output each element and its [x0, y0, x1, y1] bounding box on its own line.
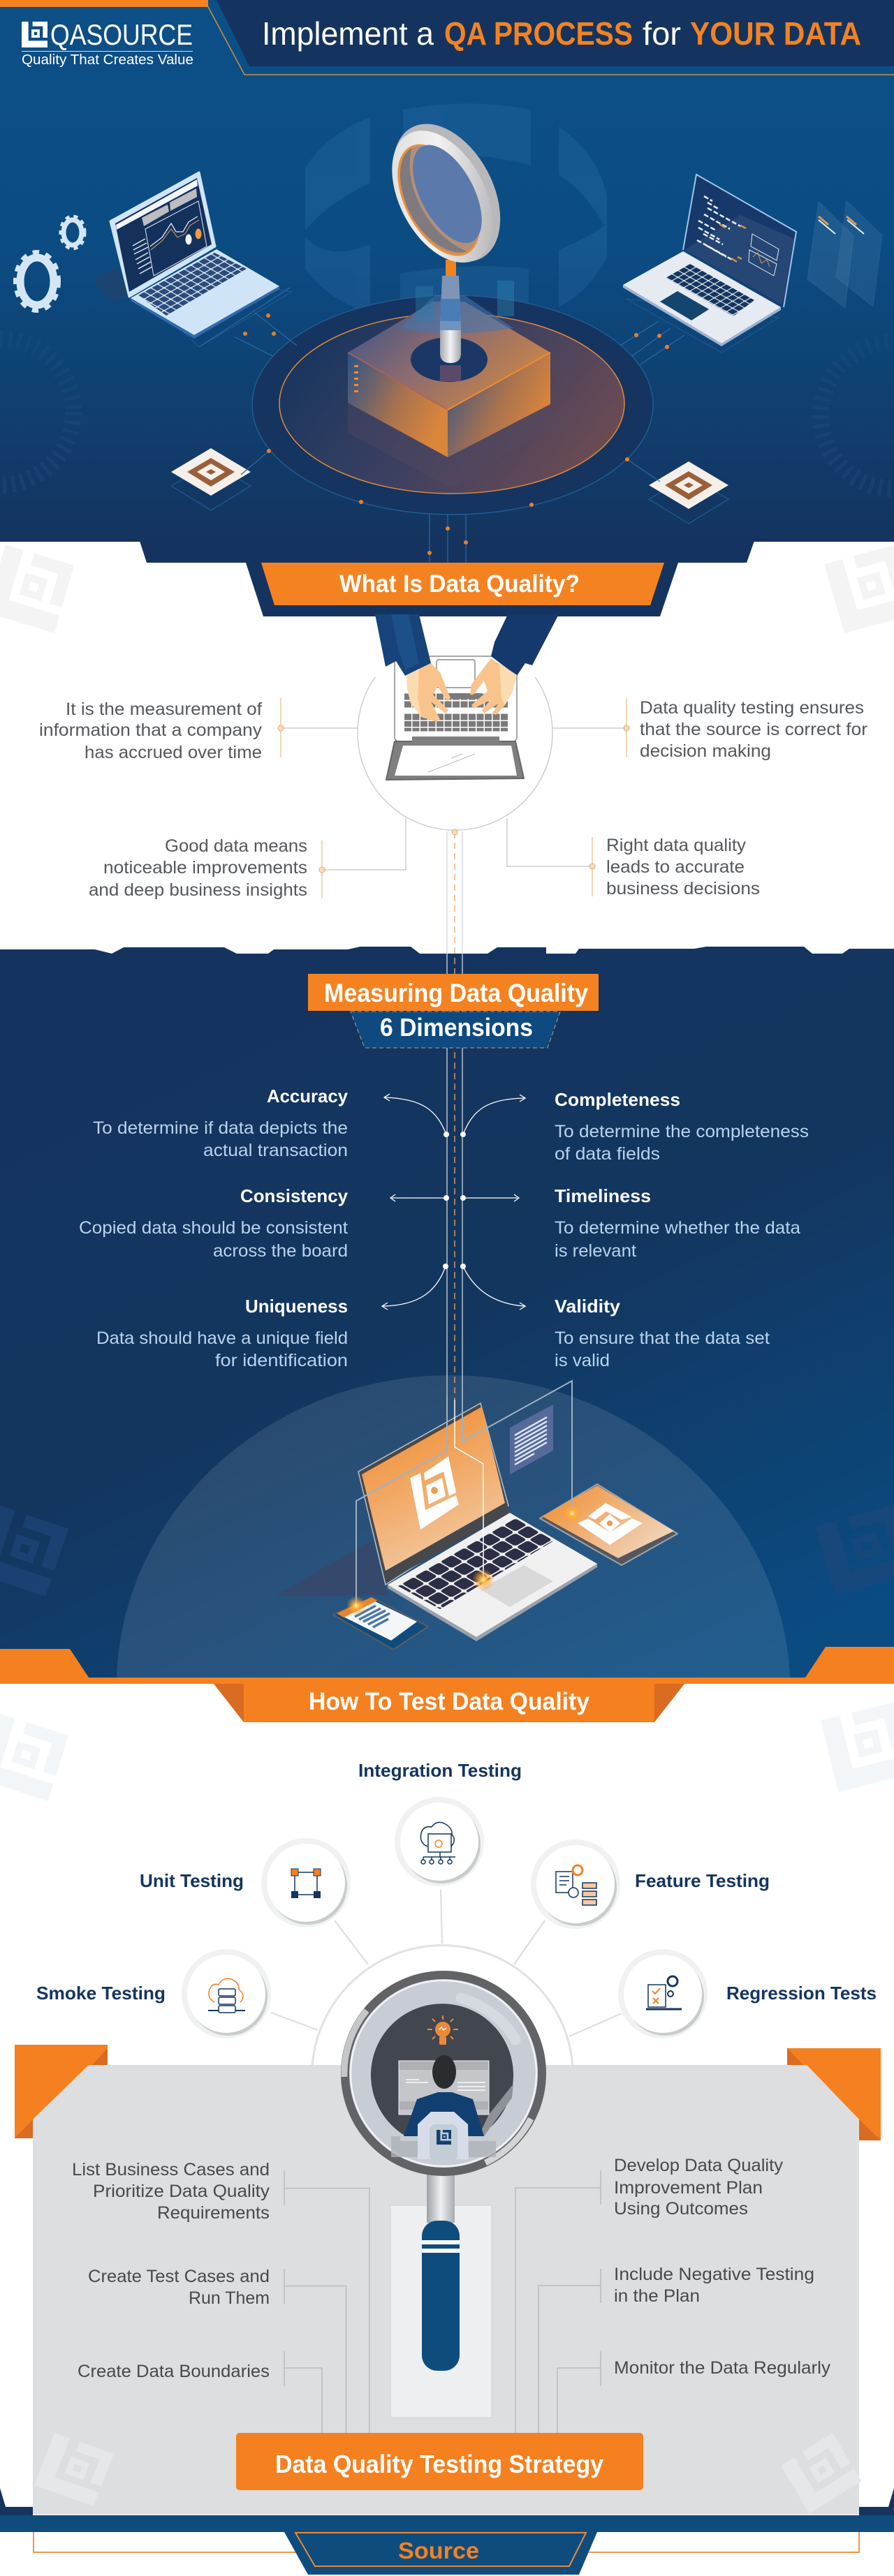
chair — [418, 2112, 469, 2159]
text block: Develop improvement plan — [614, 2156, 784, 2219]
icon: floating documents — [807, 201, 882, 308]
item: Integration Testing — [358, 1760, 522, 1886]
text block: good data: and deep business insights — [89, 880, 307, 900]
item: Uniqueness: for identification — [215, 1351, 348, 1370]
text block: measurement of information: has accrued over time — [85, 743, 262, 762]
item: Integration Testing: Integration Testing — [358, 1760, 522, 1781]
title: QA PROCESS — [444, 15, 633, 52]
icon: right laptop with code — [623, 175, 796, 353]
person — [404, 2092, 484, 2136]
watermark logos: test section — [0, 1702, 894, 1801]
icon: gears — [16, 216, 85, 310]
arrows: six dimensions — [382, 1094, 525, 1310]
item: Accuracy: To determine if data depicts the — [93, 1118, 348, 1138]
heading: Measuring Data Quality: Measuring Data Quality — [324, 979, 588, 1007]
glass highlight — [461, 1998, 515, 2040]
text block: good data: noticeable improvements — [103, 858, 307, 878]
vertical connector lines — [447, 829, 462, 1451]
node connectors left — [199, 288, 297, 356]
icon: left laptop with dashboard — [93, 172, 292, 347]
text block: Create Test Cases: Create Test Cases and — [88, 2267, 270, 2286]
hands — [406, 663, 450, 722]
text block: List Business Cases — [72, 2160, 270, 2223]
item: Smoke Testing — [36, 1949, 271, 2038]
title — [262, 15, 861, 52]
small logo — [437, 2130, 451, 2145]
item: Consistency — [79, 1185, 349, 1261]
icon: chips — [171, 448, 728, 524]
subheading: 6 Dimensions — [351, 1012, 560, 1048]
text block: Develop improvement plan: Using Outcomes — [614, 2199, 748, 2219]
laptop base — [388, 1513, 597, 1641]
item: Uniqueness — [96, 1296, 348, 1370]
connectors and glow points — [346, 1381, 582, 1615]
item: Unit Testing: Unit Testing — [140, 1870, 244, 1891]
icon: magnifier with person — [344, 1975, 542, 2371]
item: Accuracy: Accuracy — [267, 1086, 349, 1106]
text block: List Business Cases: Prioritize Data Quality — [93, 2182, 270, 2201]
icon: cloud network — [420, 1822, 455, 1864]
text block: testing ensures source — [552, 698, 867, 761]
icon: large magnifying glass — [369, 106, 522, 363]
text block: measurement of information: information that a company — [39, 720, 263, 740]
orange corners and band — [0, 1647, 894, 1684]
connectors to central arch — [271, 1890, 622, 2066]
text block: testing ensures source: Data quality testing ensures — [640, 698, 864, 718]
text block: testing ensures source: decision making — [640, 741, 771, 761]
monitor — [399, 2061, 489, 2115]
icon: hands typing on laptop — [375, 614, 559, 780]
item: Timeliness: To determine whether the data — [555, 1218, 800, 1238]
tablet — [540, 1484, 677, 1565]
item: Timeliness: Timeliness — [555, 1185, 651, 1206]
header: title band — [207, 0, 894, 75]
phone — [333, 1597, 428, 1650]
item: Validity: To ensure that the data set — [555, 1328, 770, 1348]
icon: checklist and gears — [646, 1976, 682, 2009]
icon: QASource logo mark — [22, 22, 47, 47]
watermark logos: grey panel — [34, 2433, 861, 2514]
text block: List Business Cases: Requirements — [157, 2203, 270, 2223]
laptop base — [395, 656, 517, 741]
heading: Data Quality Testing Strategy: Data Quality Testing Strategy — [275, 2450, 603, 2478]
icon: document, gear and flow — [556, 1865, 596, 1905]
text block: testing ensures source: that the source is correct for — [640, 720, 867, 739]
lens ring — [345, 1975, 542, 2172]
item: Consistency: across the board — [213, 1241, 348, 1261]
item: Timeliness: is relevant — [555, 1241, 636, 1261]
item: Feature Testing: Feature Testing — [635, 1870, 770, 1891]
circuit connectors and nodes — [241, 313, 684, 563]
text block: Create Data Boundaries: Create Data Boundaries — [78, 2362, 270, 2381]
panel behind handle — [390, 2205, 492, 2418]
heading: Data Quality Testing Strategy — [236, 2433, 643, 2490]
panel: measuring data quality background — [0, 947, 894, 1678]
item: Completeness: of data fields — [555, 1144, 660, 1164]
icon: light bulb — [427, 2015, 458, 2045]
text block: right data quality: leads to accurate — [606, 857, 745, 877]
heading: How To Test Data Quality: How To Test Data Quality — [309, 1688, 590, 1715]
watermark logos: data quality section — [0, 545, 894, 633]
laptop screen — [358, 1403, 510, 1585]
item: Smoke Testing: Smoke Testing — [36, 1983, 166, 2004]
item: Validity: is valid — [555, 1351, 610, 1370]
holographic panels behind magnifier — [305, 103, 607, 321]
floating document — [510, 1405, 553, 1474]
icon: central disc with cube — [252, 281, 653, 515]
item: Timeliness — [555, 1185, 800, 1261]
icon: square nodes — [291, 1869, 321, 1898]
item: Consistency: Consistency — [240, 1185, 349, 1206]
item: Uniqueness: Uniqueness — [245, 1296, 348, 1317]
watermark logos: navy section — [0, 1504, 894, 1597]
text block: Develop improvement plan: Develop Data Quality — [614, 2156, 784, 2175]
item: Regression Tests: Regression Tests — [726, 1983, 877, 2004]
text block: Include negative testing — [614, 2265, 814, 2306]
panel: strategy grey panel with ribbons — [15, 2045, 881, 2515]
base — [131, 249, 279, 335]
text block: right data quality — [507, 818, 760, 898]
text block: measurement of information — [39, 698, 358, 762]
item: Feature Testing — [531, 1840, 770, 1929]
right chip — [649, 461, 728, 524]
item: Consistency: Copied data should be consistent — [79, 1218, 348, 1238]
text block: Create Test Cases: Run Them — [189, 2288, 270, 2308]
footer band — [0, 2488, 894, 2532]
text block: Include negative testing: Include Negative Testing — [614, 2265, 814, 2284]
divider and tagline: Quality That Creates Value — [22, 52, 193, 68]
wordmark: QASOURCE — [50, 18, 193, 51]
arms — [375, 614, 431, 676]
item: Unit Testing — [140, 1838, 351, 1927]
text block: measurement of information: It is the measurement of — [66, 699, 262, 719]
item: Uniqueness: Data should have a unique field — [96, 1328, 348, 1348]
subheading: 6 Dimensions: 6 Dimensions — [380, 1013, 533, 1042]
source section — [34, 2532, 859, 2575]
item: Validity: Validity — [555, 1296, 621, 1317]
item: Accuracy: actual transaction — [203, 1141, 348, 1160]
text block: good data: Good data means — [165, 836, 307, 856]
text block: List Business Cases: List Business Cases and — [72, 2160, 270, 2179]
screen — [110, 172, 215, 297]
item: Regression Tests — [618, 1949, 877, 2038]
laptop screen — [386, 741, 524, 780]
title: Implement a — [262, 15, 434, 52]
text block: Monitor data: Monitor the Data Regularly — [614, 2358, 831, 2378]
text block: good data — [89, 818, 406, 900]
text block: Develop improvement plan: Improvement Plan — [614, 2178, 763, 2198]
item: Accuracy — [93, 1086, 349, 1160]
title: YOUR DATA — [690, 15, 861, 52]
icon: cloud server — [208, 1978, 245, 2013]
dome behind devices — [117, 1375, 790, 1678]
header: logo — [0, 0, 208, 68]
heading: How To Test Data Quality — [214, 1684, 684, 1722]
item: Validity — [555, 1296, 770, 1370]
left chip — [171, 448, 251, 510]
text block: Include negative testing: in the Plan — [614, 2286, 700, 2306]
source section: Source — [398, 2538, 479, 2563]
shadow — [275, 1541, 388, 1596]
heading: What Is Data Quality?: What Is Data Quality? — [339, 570, 580, 598]
item: Completeness: Completeness — [555, 1089, 680, 1110]
title: for — [643, 15, 681, 52]
icon: devices illustration — [275, 1381, 677, 1650]
text block: right data quality: Right data quality — [606, 836, 747, 855]
item: Completeness: To determine the completeness — [555, 1122, 809, 1141]
dark circle — [371, 2004, 513, 2136]
item: Completeness — [555, 1089, 809, 1164]
heading: What Is Data Quality? — [261, 563, 664, 605]
panel: hero background — [0, 0, 894, 616]
strategy connector lines — [284, 2170, 601, 2433]
text block: Create Test Cases — [88, 2267, 270, 2308]
circle behind laptop — [358, 677, 552, 830]
text block: right data quality: business decisions — [606, 879, 760, 898]
